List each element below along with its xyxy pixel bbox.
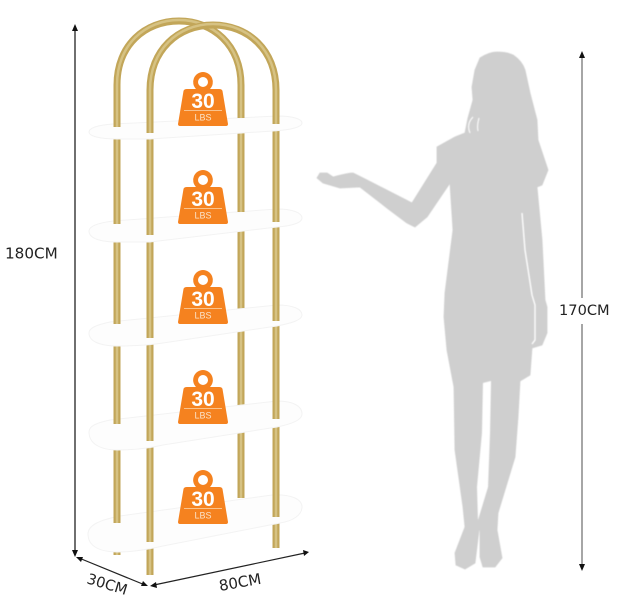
shelf 2 — [89, 209, 302, 242]
weight badge 2: 30 — [191, 188, 215, 211]
arm gap — [522, 213, 535, 344]
weight badge 3: LBS — [194, 310, 212, 320]
weight badge 4: LBS — [194, 410, 212, 420]
weight badge 2 — [178, 170, 228, 224]
height arrow: 170CM — [579, 51, 585, 571]
shelf 4 — [89, 401, 302, 450]
woman silhouette — [317, 52, 548, 569]
depth arrow: 30CM — [76, 557, 148, 586]
shelf 1 — [89, 116, 302, 139]
height arrow: 180CM — [72, 24, 78, 557]
label: 170CM: 170CM — [559, 302, 610, 319]
weight badge 5: LBS — [194, 510, 212, 520]
front gold arch — [150, 24, 276, 575]
weight badge 1: 30 — [191, 90, 215, 113]
weight badge 3: 30 — [191, 288, 215, 311]
weight badge 2: LBS — [194, 210, 212, 220]
shelf 5 — [88, 495, 302, 552]
shelf unit — [88, 20, 302, 575]
leg gap — [477, 381, 491, 520]
weight badge 5: 30 — [191, 488, 215, 511]
weight badge 1: LBS — [194, 112, 212, 122]
weight badge 1 — [178, 72, 228, 126]
width arrow: 80CM — [150, 550, 309, 588]
hair strands — [469, 117, 479, 133]
weight badge 5 — [178, 470, 228, 524]
post segments in front of shelves — [117, 112, 276, 542]
label: 80CM: 80CM — [218, 570, 263, 595]
shelf 3 — [89, 305, 302, 346]
weight badge 4: 30 — [191, 388, 215, 411]
back gold arch — [117, 20, 241, 555]
label: 30CM: 30CM — [85, 571, 129, 599]
weight badge 4 — [178, 370, 228, 424]
label: 180CM: 180CM — [5, 244, 58, 262]
weight badge 3 — [178, 270, 228, 324]
